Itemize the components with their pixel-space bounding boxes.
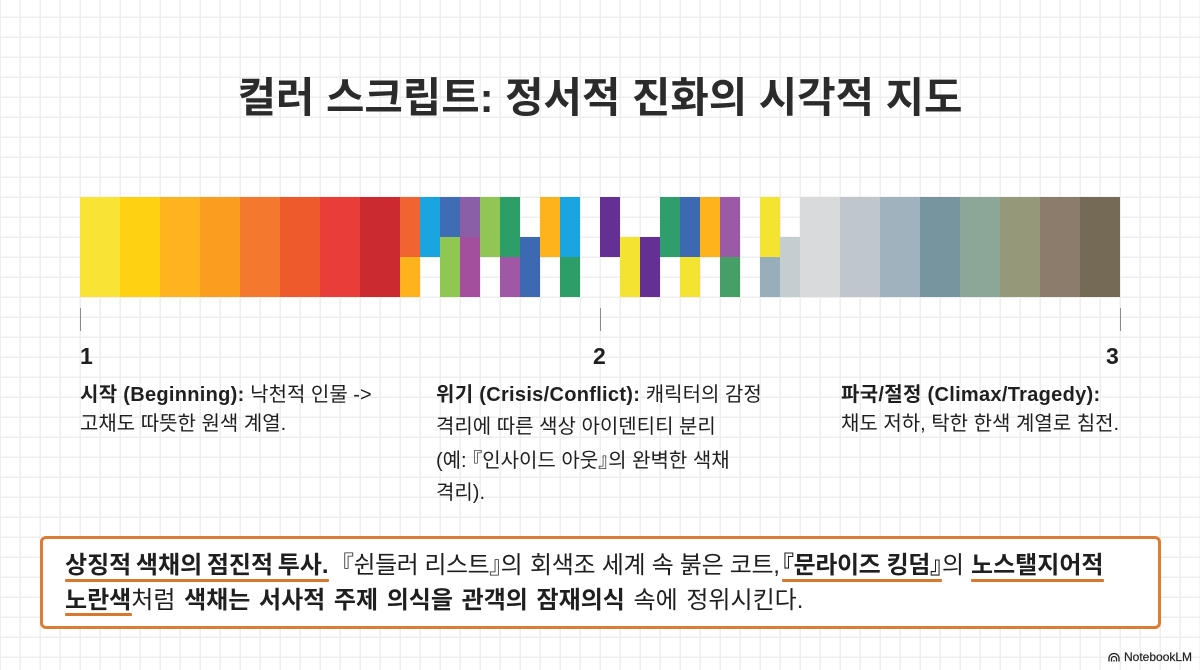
icon: NotebookLM mark [1108, 652, 1120, 662]
tick 1 [80, 308, 81, 331]
number 3: 3 [1106, 343, 1119, 369]
callout: 상징적 색채의 점진적 투사. [65, 552, 329, 579]
logo: NotebookLM: NotebookLM [1124, 650, 1192, 664]
text block: crisis: (예: 『인사이드 아웃』의 완벽한 색채 [436, 450, 730, 472]
tick 2 [600, 308, 601, 331]
text block: beginning: 시작 (Beginning): 낙천적 인물 -> [80, 384, 372, 406]
text block: crisis: 위기 (Crisis/Conflict): 캐릭터의 감정 [436, 384, 762, 406]
text block: beginning [80, 384, 372, 434]
title: 컬러 스크립트: 정서적 진화의 시각적 지도 [238, 74, 962, 121]
callout: 노란색처럼 색채는 서사적 주제 의식을 관객의 잠재의식 속에 정위시킨다. [65, 587, 803, 614]
text block: beginning: 고채도 따뜻한 원색 계열. [80, 412, 286, 434]
text block: crisis: 격리에 따른 색상 아이덴티티 분리 [436, 416, 716, 438]
callout [40, 536, 1161, 629]
callout: 『문라이즈 킹덤』 [770, 552, 954, 579]
color script bar chart [80, 197, 1120, 297]
callout: 의 [942, 552, 964, 579]
text block: climax: 채도 저하, 탁한 한색 계열로 침전. [841, 412, 1119, 434]
callout: 회색조 세계 속 붉은 코트, [530, 552, 780, 579]
tick 3 [1120, 308, 1121, 331]
text block: crisis: 격리). [436, 482, 485, 504]
number 1: 1 [80, 343, 93, 369]
text block: climax: 파국/절정 (Climax/Tragedy): [841, 384, 1100, 406]
text block: climax [841, 384, 1119, 434]
text block: crisis [436, 384, 762, 504]
callout: 노스탤지어적 [971, 552, 1103, 579]
callout: 『쉰들러 리스트』의 [330, 552, 522, 579]
number 2: 2 [593, 343, 606, 369]
